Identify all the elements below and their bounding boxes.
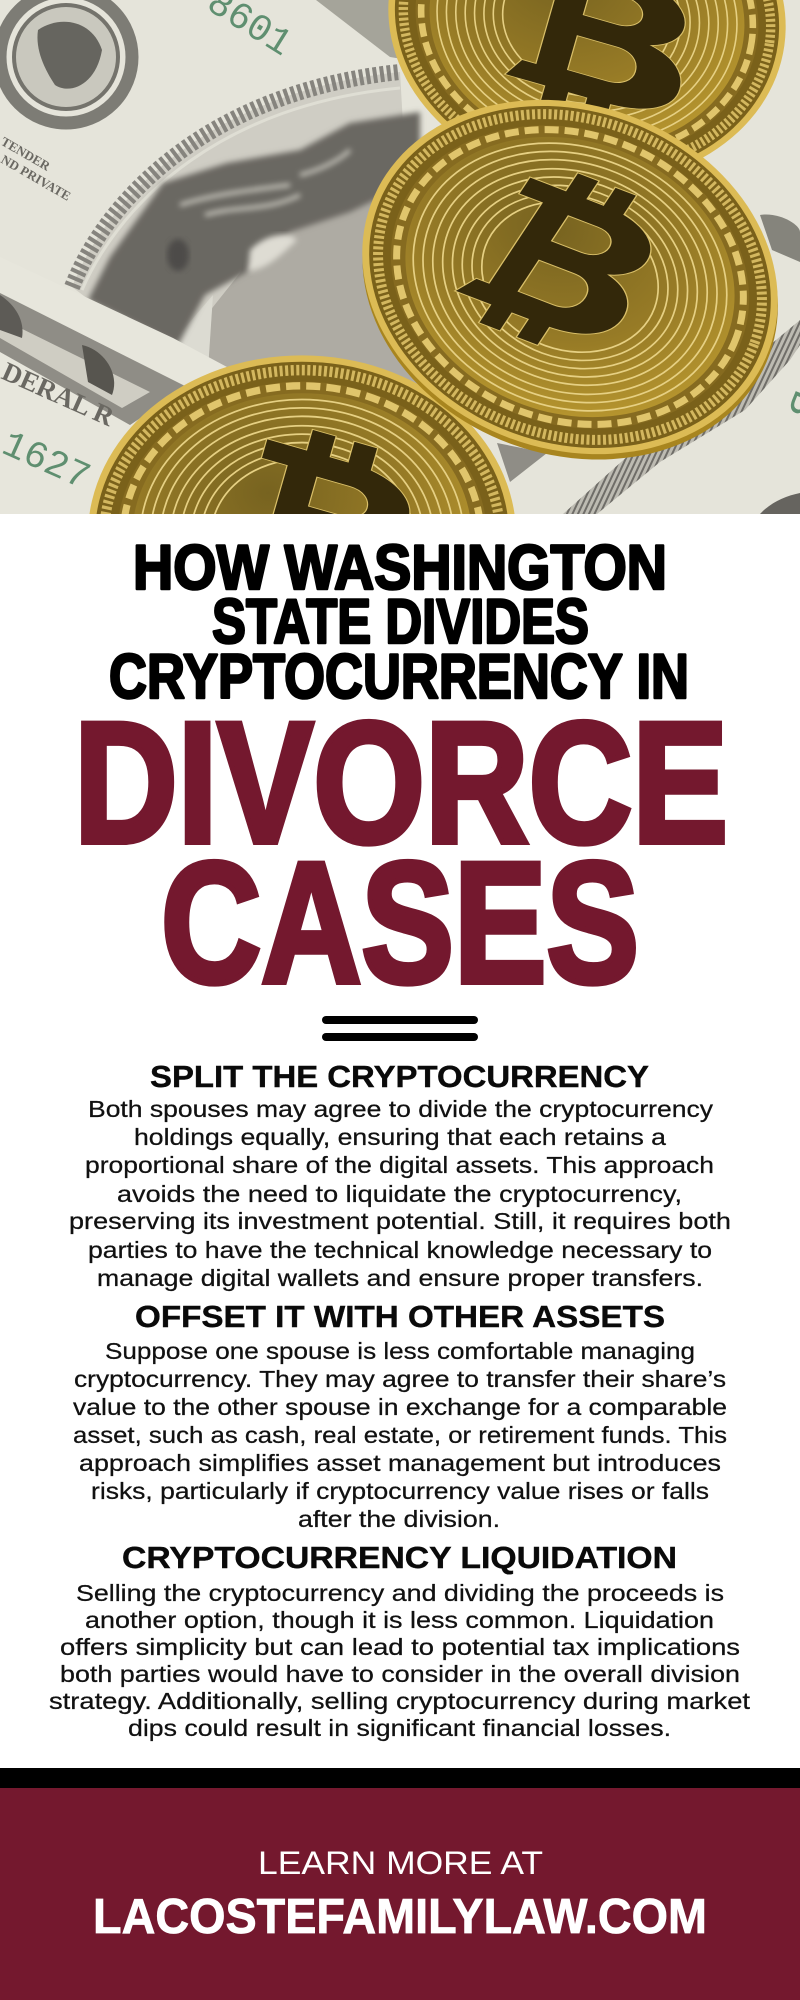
body text: manage digital wallets and ensure proper transfers. bbox=[97, 1265, 703, 1291]
black band bbox=[0, 1768, 800, 1788]
body text: asset, such as cash, real estate, or retirement funds. This bbox=[73, 1422, 727, 1448]
learn more at: LEARN MORE AT bbox=[258, 1845, 543, 1881]
heading: CRYPTOCURRENCY LIQUIDATION bbox=[122, 1541, 677, 1575]
top coin bitcoin symbol bbox=[504, 0, 686, 110]
heading: SPLIT THE CRYPTOCURRENCY bbox=[150, 1060, 649, 1094]
section: cryptocurrency liquidation bbox=[49, 1541, 751, 1741]
bitcoin coin: main bbox=[362, 100, 778, 460]
heading: OFFSET IT WITH OTHER ASSETS bbox=[135, 1300, 665, 1334]
legal tender text: TENDER bbox=[0, 134, 53, 174]
lower bill engraving bbox=[0, 293, 187, 425]
footer panel bbox=[0, 1788, 800, 2000]
body text: both parties would have to consider in the overall division bbox=[60, 1661, 740, 1687]
website url: LACOSTEFAMILYLAW.COM bbox=[93, 1890, 707, 1944]
section: offset it with other assets bbox=[73, 1300, 727, 1532]
small bill print: DERAL R bbox=[0, 356, 119, 432]
body text: parties to have the technical knowledge necessary to bbox=[88, 1237, 712, 1263]
federal reserve seal bbox=[0, 0, 132, 123]
body text: proportional share of the digital assets. This approach bbox=[85, 1152, 714, 1178]
body text: avoids the need to liquidate the cryptocurrency, bbox=[117, 1181, 682, 1207]
body text bbox=[49, 1580, 751, 1741]
body text: holdings equally, ensuring that each retains a bbox=[134, 1124, 666, 1150]
body text: strategy. Additionally, selling cryptocurrency during market bbox=[49, 1688, 751, 1714]
overlapping bill strip bbox=[85, 297, 227, 375]
title line 1: HOW WASHINGTON bbox=[133, 533, 667, 603]
bill corner band bbox=[316, 0, 397, 58]
body text: value to the other spouse in exchange for a comparable bbox=[73, 1394, 727, 1420]
section: split the cryptocurrency bbox=[69, 1060, 731, 1291]
hero photo: bitcoins on dollar bills bbox=[0, 0, 800, 514]
body text bbox=[69, 1096, 731, 1291]
body text: Both spouses may agree to divide the cryptocurrency bbox=[88, 1096, 714, 1122]
body text: risks, particularly if cryptocurrency value rises or falls bbox=[91, 1478, 709, 1504]
bottom coin bitcoin symbol bbox=[260, 428, 410, 514]
body text: approach simplifies asset management but introduces bbox=[79, 1450, 721, 1476]
body text: another option, though it is less common. Liquidation bbox=[85, 1607, 714, 1633]
body text: Suppose one spouse is less comfortable managing bbox=[105, 1338, 695, 1364]
body text: preserving its investment potential. Still, it requires both bbox=[69, 1208, 731, 1234]
title word: cases: CASES bbox=[161, 827, 639, 1019]
body text: Selling the cryptocurrency and dividing the proceeds is bbox=[76, 1580, 724, 1606]
bitcoin coin: top bbox=[388, 0, 786, 158]
body text: cryptocurrency. They may agree to transfer their share’s bbox=[74, 1366, 726, 1392]
double rule divider bbox=[322, 1016, 478, 1041]
legal tender text line two: ND PRIVATE bbox=[0, 152, 73, 204]
body text: dips could result in significant financial losses. bbox=[128, 1715, 671, 1741]
body text bbox=[73, 1338, 727, 1532]
body text: offers simplicity but can lead to potential tax implications bbox=[60, 1634, 740, 1660]
title line 2: STATE DIVIDES bbox=[212, 587, 589, 657]
portrait hair bbox=[88, 112, 420, 345]
title bbox=[74, 533, 728, 1019]
title line 3: CRYPTOCURRENCY IN bbox=[109, 642, 689, 712]
portrait face bbox=[209, 199, 418, 384]
body text: after the division. bbox=[298, 1506, 500, 1532]
right side bill engraving bbox=[497, 215, 800, 514]
portrait oval bbox=[72, 72, 420, 420]
main coin bitcoin symbol bbox=[454, 172, 652, 346]
portrait collar bbox=[180, 296, 213, 358]
bitcoin coin: bottom bbox=[90, 355, 514, 514]
